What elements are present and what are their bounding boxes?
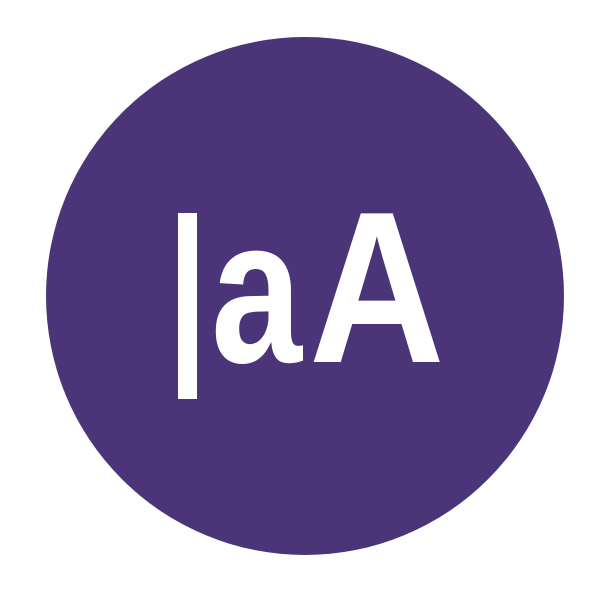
logo letter A: A — [309, 167, 445, 408]
logo letter a: a — [211, 174, 303, 406]
cursor bar — [178, 213, 197, 399]
purple circle background — [46, 37, 564, 555]
